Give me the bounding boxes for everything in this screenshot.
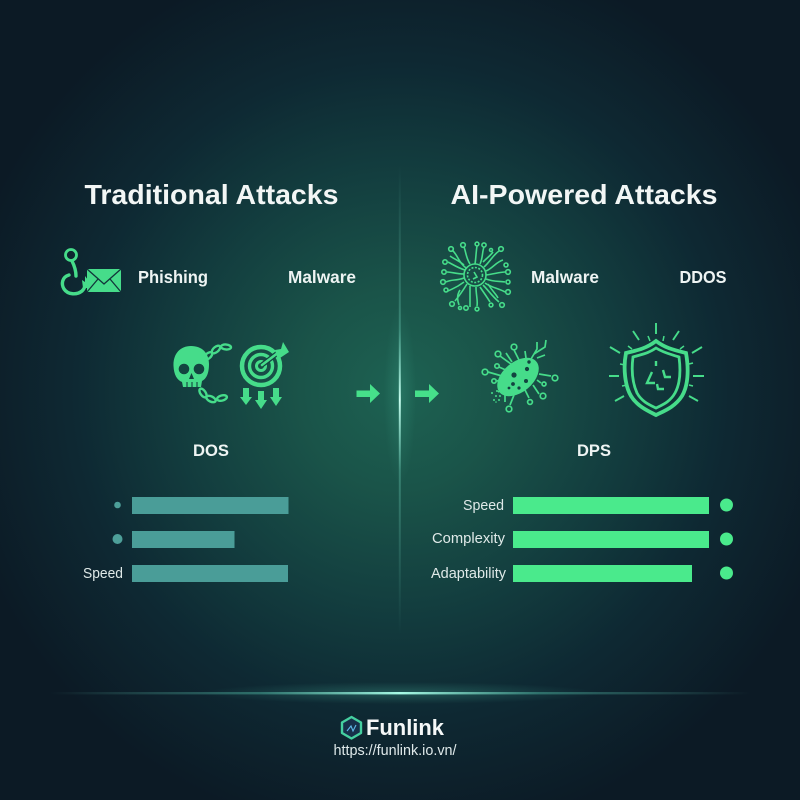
label: DDOS: DDOS	[680, 267, 726, 287]
logo: Funlink: Funlink	[366, 715, 444, 740]
label: Phishing: Phishing	[138, 267, 208, 287]
arrow: right of divider	[415, 384, 439, 403]
label: Malware (AI): Malware	[531, 267, 599, 287]
url: https://funlink.io.vn/	[334, 742, 457, 759]
heading: Traditional Attacks: Traditional Attacks	[84, 179, 338, 210]
icon: shield with rays	[609, 323, 704, 415]
icon: skull with broken chain	[173, 344, 231, 403]
label: DPS: DPS	[577, 441, 611, 460]
icon: circuit brain	[441, 242, 510, 311]
label: Malware (traditional): Malware	[288, 267, 356, 287]
icon: phishing hook and envelope	[62, 250, 121, 294]
bar chart: AI-powered attacks: Speed	[463, 498, 504, 514]
bar chart: AI-powered attacks: Complexity	[432, 531, 506, 547]
bar chart: AI-powered attacks	[431, 497, 733, 582]
arrow: left of divider	[356, 384, 380, 403]
label: DOS: DOS	[193, 441, 229, 460]
icon: virus bacterium	[482, 340, 558, 412]
footer glow line	[50, 682, 750, 704]
heading: AI-Powered Attacks: AI-Powered Attacks	[450, 179, 718, 210]
center divider	[384, 165, 416, 635]
bar chart: traditional attacks	[83, 497, 288, 582]
bar chart: AI-powered attacks: Adaptability	[431, 566, 507, 582]
icon: target with arrow and down arrows	[240, 342, 289, 409]
bar chart: traditional attacks: Speed	[83, 566, 123, 582]
